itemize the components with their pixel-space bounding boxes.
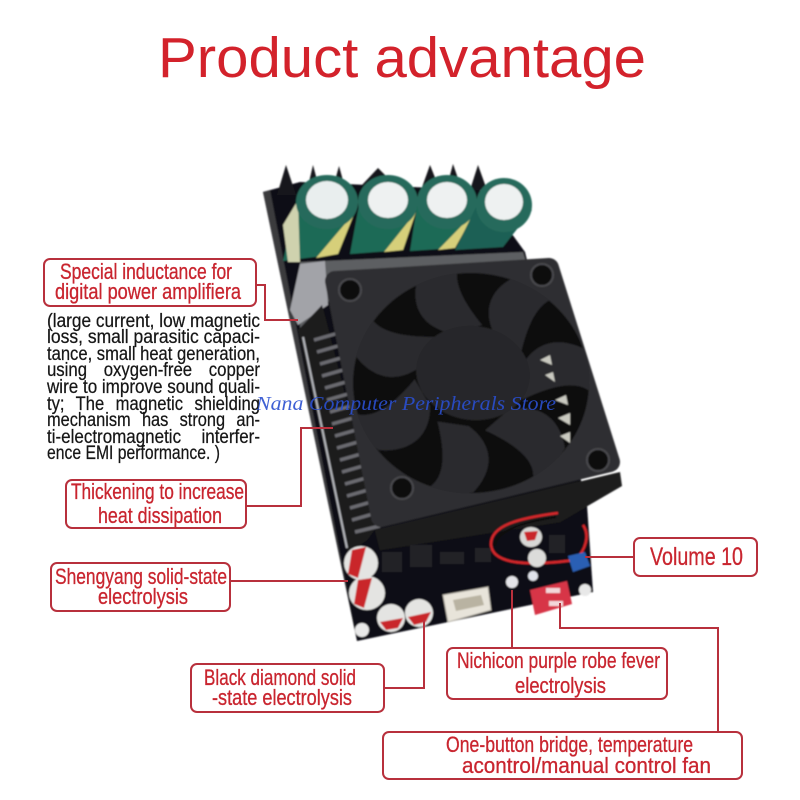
callout: thickening: heat dissipation xyxy=(98,503,222,528)
callout: Nichicon xyxy=(447,590,667,699)
inductance description text: ti-electromagnetic interfer- xyxy=(47,426,260,448)
callout: thickening: Thickening to increase xyxy=(71,479,244,504)
inductance description text: loss, small parasitic capaci- xyxy=(47,326,260,348)
white connector xyxy=(443,587,491,622)
inductance description text xyxy=(46,310,260,464)
title: Product advantage xyxy=(158,26,646,90)
chips on board xyxy=(382,535,565,572)
callout: one-button bridge: One-button bridge, temperature xyxy=(446,732,693,757)
callout: Shengyang xyxy=(51,563,348,611)
callout: special inductance xyxy=(44,259,298,320)
callout: special inductance: digital power amplifiera xyxy=(55,279,242,304)
inductance description text: wire to improve sound quali- xyxy=(46,376,260,398)
inductance description text: tance, small heat generation, xyxy=(47,343,260,365)
callout: Black diamond: -state electrolysis xyxy=(212,685,352,710)
callout: Volume 10 xyxy=(585,538,757,576)
callout: Black diamond xyxy=(191,620,424,712)
callout: Shengyang: Shengyang solid-state xyxy=(55,564,227,589)
solid-state capacitors xyxy=(344,527,591,637)
fan power wires xyxy=(491,513,586,563)
inductance description text: using oxygen-free copper xyxy=(47,359,260,381)
cooling fan xyxy=(335,247,622,550)
inductance description text: ty; The magnetic shielding xyxy=(47,393,260,415)
side heat sink fins xyxy=(298,305,378,553)
callout: thickening xyxy=(66,428,333,528)
callout: Shengyang: electrolysis xyxy=(98,584,188,609)
callout: one-button bridge xyxy=(383,603,742,779)
inductance description text: ence EMI performance. ) xyxy=(47,442,220,464)
callout: Nichicon: Nichicon purple robe fever xyxy=(457,648,660,673)
blue trim potentiometer xyxy=(568,552,590,572)
red DIP switch xyxy=(530,581,572,615)
callout: one-button bridge: acontrol/manual control fan xyxy=(462,753,711,778)
callout: Nichicon: electrolysis xyxy=(515,673,606,698)
inductance description text: (large current, low magnetic xyxy=(47,310,260,332)
electrolytic capacitors xyxy=(283,175,532,262)
amplifier board photo xyxy=(263,164,622,641)
fan hub xyxy=(410,319,536,427)
callout: Volume 10: Volume 10 xyxy=(650,543,743,571)
circuit board xyxy=(263,182,593,641)
grey inductor block xyxy=(300,252,530,330)
callout: special inductance: Special inductance for xyxy=(60,259,232,284)
callout: Black diamond: Black diamond solid xyxy=(204,665,356,690)
rear heat sink teeth xyxy=(277,164,487,195)
inductance description text: mechanism has strong an- xyxy=(47,409,260,431)
watermark: Nana Computer Peripherals Store xyxy=(255,393,556,415)
